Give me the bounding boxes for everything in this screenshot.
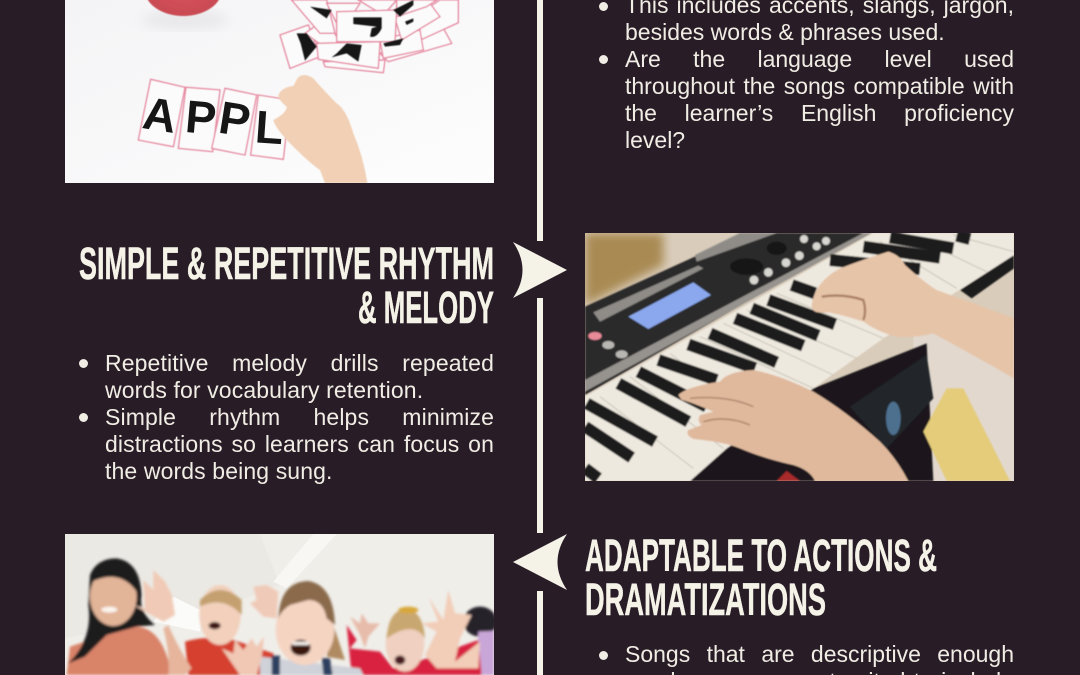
text block: accents and language level bullets: besides words & phrases used. [625, 19, 945, 45]
timeline line [537, 0, 543, 675]
arrow: pointing right to keyboard photo [513, 242, 567, 298]
photo: child arranging letter cards: P [216, 91, 254, 147]
heading: adaptable to actions and dramatizations [585, 532, 937, 622]
heading: simple and repetitive rhythm and melody [79, 240, 494, 330]
text block: melody and rhythm bullets: Simple rhythm helps minimize [105, 404, 494, 430]
text block: melody and rhythm bullets: Repetitive melody drills repeated [105, 350, 494, 376]
text block: accents and language level bullets: throughout the songs compatible with [625, 73, 1014, 99]
text block: accents and language level bullets: the learner’s English proficiency [625, 100, 1014, 126]
text block: melody and rhythm bullets: the words being sung. [105, 458, 333, 484]
photo: child arranging letter cards [65, 0, 494, 183]
photo: children acting out a song [65, 534, 494, 675]
text block: melody and rhythm bullets [79, 350, 494, 484]
arrow: pointing left to children photo [513, 534, 567, 590]
text block: descriptive songs bullet: Songs that are descriptive enough [625, 641, 1014, 667]
text block: accents and language level bullets: Are the language level used [625, 46, 1014, 72]
photo: child arranging letter cards: L [254, 100, 285, 154]
photo: child arranging letter cards: P [183, 90, 218, 145]
photo: child arranging letter cards: A [140, 86, 181, 143]
text block: melody and rhythm bullets: distractions so learners can focus on [105, 431, 494, 457]
text block: melody and rhythm bullets: words for vocabulary retention. [105, 377, 423, 403]
text block: accents and language level bullets [599, 0, 1014, 153]
text block: accents and language level bullets: level? [625, 127, 685, 153]
photo: hands playing keyboard [585, 233, 1014, 481]
